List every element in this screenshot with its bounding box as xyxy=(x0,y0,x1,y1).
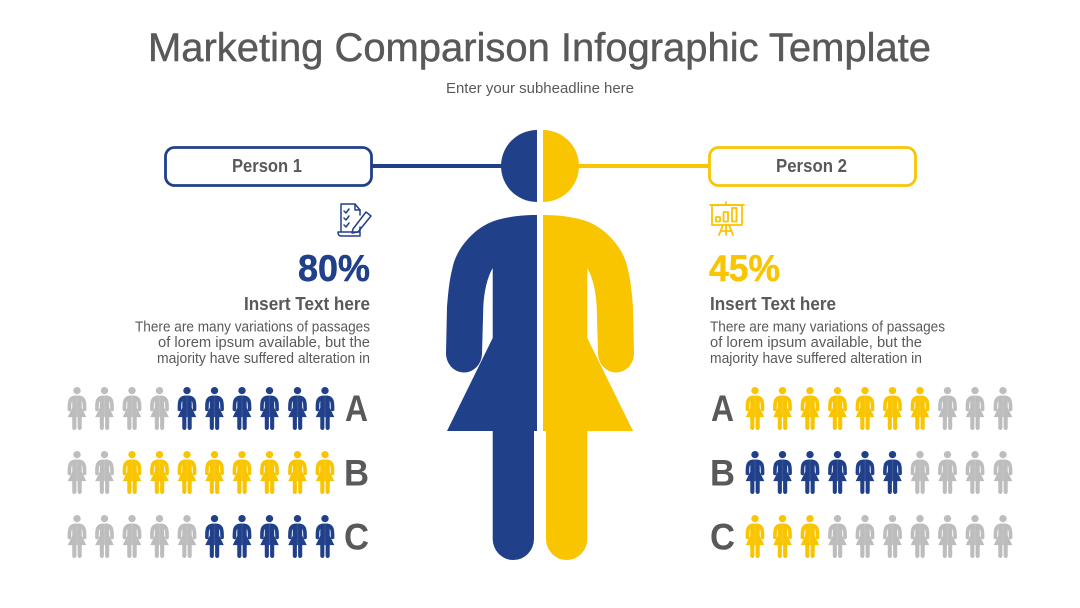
figure body: blue half xyxy=(446,215,537,560)
pictogram row: right A xyxy=(711,387,1012,430)
label box: Person 1 xyxy=(166,148,372,186)
pictogram row: left B: B xyxy=(344,452,369,494)
stat body text: of lorem ipsum available, but the xyxy=(710,335,922,351)
pictogram row: right C: C xyxy=(710,516,735,558)
label box: Person 1: Person 1 xyxy=(232,156,302,176)
connector line: person 2 xyxy=(578,164,710,168)
pictogram row: left C: C xyxy=(344,516,369,558)
pictogram row: right A: A xyxy=(711,388,734,429)
stat value 80%: 80% xyxy=(298,248,370,289)
figure head: blue half xyxy=(501,130,537,202)
stat block: person 1 xyxy=(135,248,370,367)
connector line: person 1 xyxy=(372,164,502,168)
icon: checklist and pencil xyxy=(338,204,371,236)
stat body text: There are many variations of passages xyxy=(710,320,945,336)
central figure xyxy=(372,130,710,560)
stat body text: majority have suffered alteration in xyxy=(157,351,370,367)
pictogram row: left B xyxy=(68,451,369,494)
pictogram row: right B xyxy=(710,451,1012,494)
stat value 45%: 45% xyxy=(709,248,780,289)
stat body text: There are many variations of passages xyxy=(135,320,370,336)
label box: Person 2: Person 2 xyxy=(776,156,847,176)
label box: Person 2 xyxy=(710,148,916,186)
pictogram row: right B: B xyxy=(710,452,735,494)
subheadline: Enter your subheadline here xyxy=(446,81,634,97)
stat heading: Insert Text here xyxy=(710,293,836,314)
title: Marketing Comparison Infographic Template xyxy=(148,26,931,70)
stat body text: of lorem ipsum available, but the xyxy=(158,335,370,351)
icon: presentation board xyxy=(710,202,744,235)
figure body: yellow half xyxy=(543,215,634,560)
pictogram row: right C xyxy=(710,515,1012,558)
stat body text: majority have suffered alteration in xyxy=(710,351,922,367)
pictogram row: left A xyxy=(68,387,368,430)
stat body text xyxy=(135,320,370,367)
figure head: yellow half xyxy=(543,130,579,202)
stat block: person 2 xyxy=(709,248,945,367)
stat heading: Insert Text here xyxy=(244,293,370,314)
stat body text xyxy=(710,320,945,367)
pictogram row: left C xyxy=(68,515,369,558)
pictogram row: left A: A xyxy=(345,388,368,429)
